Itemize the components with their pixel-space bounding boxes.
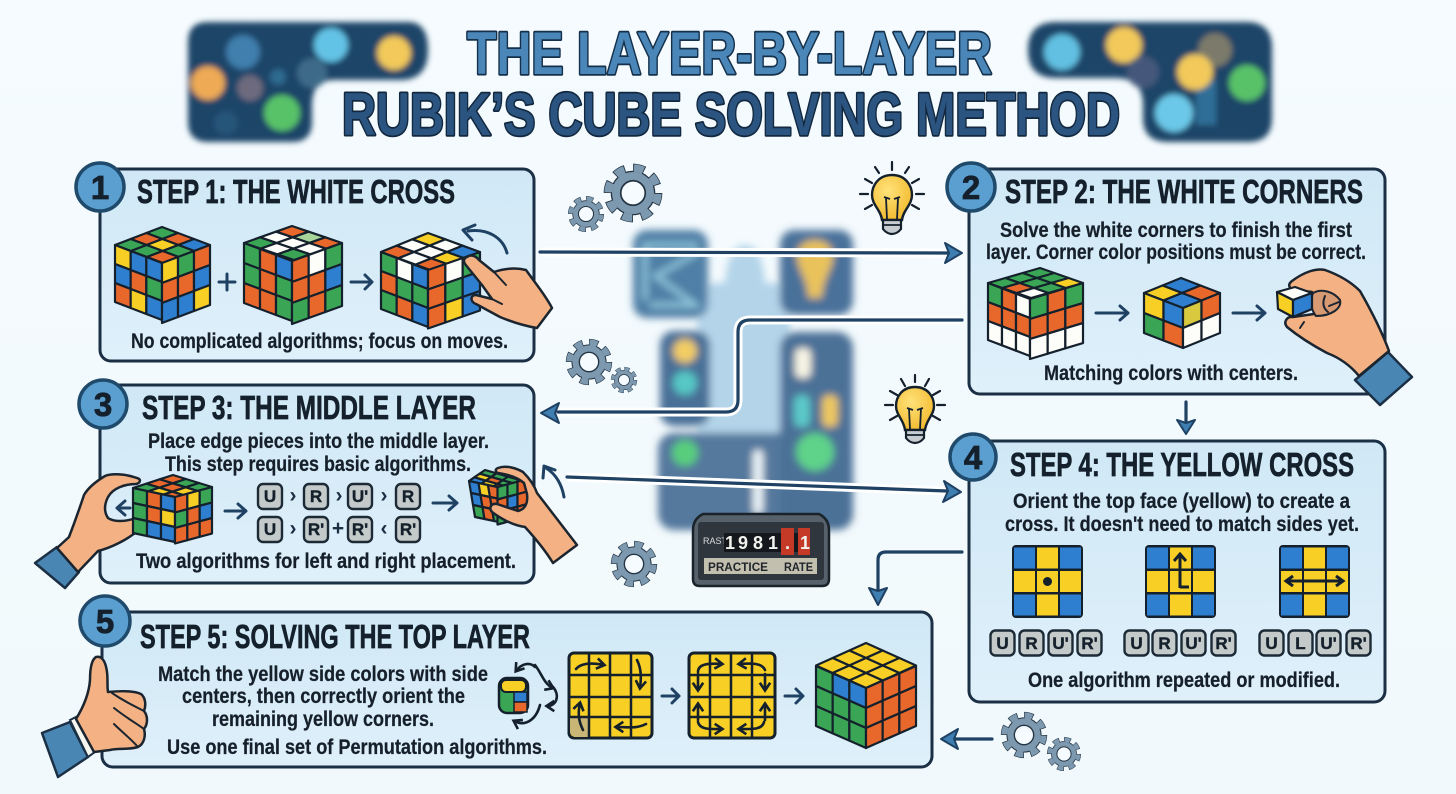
- arrow: grid to solved cube: [785, 689, 803, 703]
- algorithm keys: dot: [990, 630, 1102, 656]
- text: step 3 description: This step requires basic algorithms.: [165, 453, 471, 476]
- cube: corner block: [1144, 278, 1220, 348]
- yellow cross state: dot: [1012, 545, 1083, 618]
- icon: small cube with rotation arrows: [499, 664, 557, 723]
- arrow: step 1 to step 2: [540, 243, 962, 263]
- arrow: grid to grid: [662, 689, 679, 703]
- arrow: step 2 to step 4: [1177, 402, 1195, 434]
- algorithm keys: line: R': [1350, 634, 1367, 653]
- title: THE LAYER-BY-LAYER: [467, 20, 992, 87]
- badge: step 5: [80, 596, 130, 646]
- algorithm keys: R: [310, 487, 322, 506]
- arrow: cube to algorithm: [225, 504, 246, 518]
- badge: step 2: 2: [962, 169, 980, 206]
- icon: practice rate counter: RATE: [784, 560, 813, 574]
- text: step 3 note: Two algorithms for left and right placement.: [136, 550, 516, 573]
- text: step 4 description: cross. It doesn't need to match sides yet.: [1005, 513, 1359, 536]
- algorithm keys: U: [264, 487, 276, 506]
- icon: light bulb middle: [885, 375, 945, 443]
- algorithm keys: R': [400, 520, 416, 539]
- badge: step 1: [76, 163, 124, 211]
- algorithm keys: R': [308, 520, 324, 539]
- badge: step 5: 5: [96, 603, 114, 640]
- text: step 4 note: One algorithm repeated or modified.: [1028, 669, 1340, 692]
- algorithm keys: ‹: [380, 517, 388, 540]
- panel: step 1: [100, 169, 552, 361]
- icon: gears middle: [569, 342, 635, 391]
- badge: step 2: [947, 163, 995, 211]
- cube: right hand cube: [469, 470, 528, 524]
- cube: white cross: [244, 226, 342, 324]
- arrow: turn direction: [463, 225, 507, 253]
- cube: scrambled: [115, 227, 210, 323]
- algorithm keys: dot: R: [1025, 634, 1038, 653]
- cube: solved: [816, 643, 916, 748]
- cube: turning: [381, 233, 480, 328]
- arrow: step 2 to step 3: [541, 320, 962, 423]
- icon: right hand: [490, 467, 577, 563]
- arrow: rotation: [543, 466, 564, 497]
- blurred central flow diagram: [633, 230, 853, 530]
- icon: left hand: [57, 474, 143, 572]
- cube: first layer: [988, 268, 1083, 359]
- title: [342, 20, 1120, 148]
- pattern grid: first permutation: [569, 653, 652, 738]
- icon: hand turning cube: [464, 256, 552, 328]
- yellow cross state: L shape: [1145, 545, 1216, 618]
- heading: step 3: STEP 3: THE MIDDLE LAYER: [142, 389, 476, 426]
- text: step 5 description: [158, 663, 547, 759]
- blurred title decoration: left: [188, 22, 428, 142]
- title: RUBIK’S CUBE SOLVING METHOD: [342, 81, 1120, 148]
- algorithm keys: dot: U: [996, 634, 1009, 653]
- icon: left cuff: [35, 547, 79, 588]
- algorithm keys: ›: [336, 484, 342, 507]
- icon: practice rate counter: 1981.1: [725, 533, 810, 553]
- icon: hand cuff: [1355, 352, 1412, 405]
- blurred title decoration: right: [1028, 22, 1272, 142]
- algorithm keys: line: L: [1295, 634, 1306, 653]
- icon: gears bottom right: [1004, 715, 1078, 768]
- text: step 2 description: [986, 219, 1366, 264]
- arrow: gears to step 5: [941, 729, 992, 749]
- text: step 4 description: [1005, 490, 1359, 536]
- arrow: second cube to corner: [1233, 306, 1265, 320]
- algorithm keys: L shape: U': [1185, 634, 1202, 653]
- algorithm keys: [258, 484, 420, 542]
- text: step 2 note: Matching colors with centers.: [1044, 362, 1298, 385]
- algorithm keys: dot: R': [1081, 634, 1098, 653]
- icon: gears top center: [571, 168, 658, 229]
- panel: step 4: [969, 441, 1385, 702]
- text: step 3 description: [148, 430, 489, 476]
- panel: step 3: [35, 385, 577, 588]
- text: step 3 description: Place edge pieces into the middle layer.: [148, 430, 489, 453]
- icon: corner piece: [1277, 287, 1312, 317]
- heading: step 5: STEP 5: SOLVING THE TOP LAYER: [140, 618, 530, 655]
- icon: practice rate counter: RAST: [703, 536, 728, 546]
- algorithm keys: line: U': [1320, 634, 1337, 653]
- badge: step 1: 1: [91, 169, 109, 206]
- arrow: step 4 to step 5: [869, 552, 962, 605]
- algorithm keys: line: U: [1265, 634, 1278, 653]
- badge: step 3: 3: [94, 386, 112, 423]
- arrow: cube to cube: [351, 275, 372, 289]
- algorithm keys: dot: U': [1052, 634, 1069, 653]
- algorithm keys: R': [352, 520, 368, 539]
- text: step 2 description: Solve the white corners to finish the first: [1000, 219, 1352, 242]
- badge: step 3: [79, 380, 127, 428]
- icon: left arrow on cube: [117, 501, 130, 515]
- heading: step 1: STEP 1: THE WHITE CROSS: [137, 173, 455, 210]
- text: step 5 description: Use one final set of Permutation algorithms.: [167, 736, 547, 759]
- algorithm keys: R: [402, 487, 414, 506]
- algorithm keys: L shape: R': [1215, 634, 1232, 653]
- pattern grid: second permutation: [689, 653, 775, 738]
- arrow: first to second cube: [1096, 306, 1128, 320]
- icon: light bulb top: [860, 162, 924, 234]
- algorithm keys: L shape: R: [1158, 634, 1171, 653]
- text: step 5 description: remaining yellow corners.: [212, 708, 434, 731]
- text: step 1 note: No complicated algorithms; focus on moves.: [131, 330, 508, 353]
- badge: step 4: [950, 434, 996, 480]
- algorithm keys: ›: [380, 484, 388, 507]
- algorithm keys: L shape: [1124, 630, 1236, 656]
- algorithm keys: L shape: U: [1130, 634, 1143, 653]
- icon: hand holding corner piece: [1285, 269, 1389, 376]
- algorithm keys: U': [352, 487, 368, 506]
- algorithm keys: +: [332, 517, 344, 540]
- icon: practice rate counter: [693, 514, 829, 586]
- arrow: step 3 to step 4: [567, 477, 961, 502]
- icon: thumb cuff: [42, 717, 95, 777]
- icon: practice rate counter: PRACTICE: [708, 560, 768, 574]
- panel: step 2: [969, 169, 1412, 405]
- text: step 5 description: Match the yellow side colors with side: [158, 663, 488, 686]
- arrow: algorithm to cube: [433, 496, 457, 510]
- icon: plus: [219, 274, 235, 290]
- yellow cross state: line: [1279, 545, 1350, 618]
- badge: step 4: 4: [964, 439, 983, 476]
- cube: middle layer held: [133, 475, 212, 544]
- algorithm keys: ›: [290, 517, 296, 540]
- text: step 4 description: Orient the top face (yellow) to create a: [1013, 490, 1350, 513]
- algorithm keys: U: [264, 520, 276, 539]
- icon: thumbs up hand: [76, 657, 147, 752]
- algorithm keys: line: [1260, 630, 1370, 656]
- text: step 5 description: centers, then correctly orient the: [182, 685, 465, 708]
- algorithm keys: ›: [290, 484, 296, 507]
- panel: step 5: [42, 612, 932, 777]
- icon: gear lower: [614, 544, 654, 584]
- text: step 2 description: layer. Corner color positions must be correct.: [986, 241, 1366, 264]
